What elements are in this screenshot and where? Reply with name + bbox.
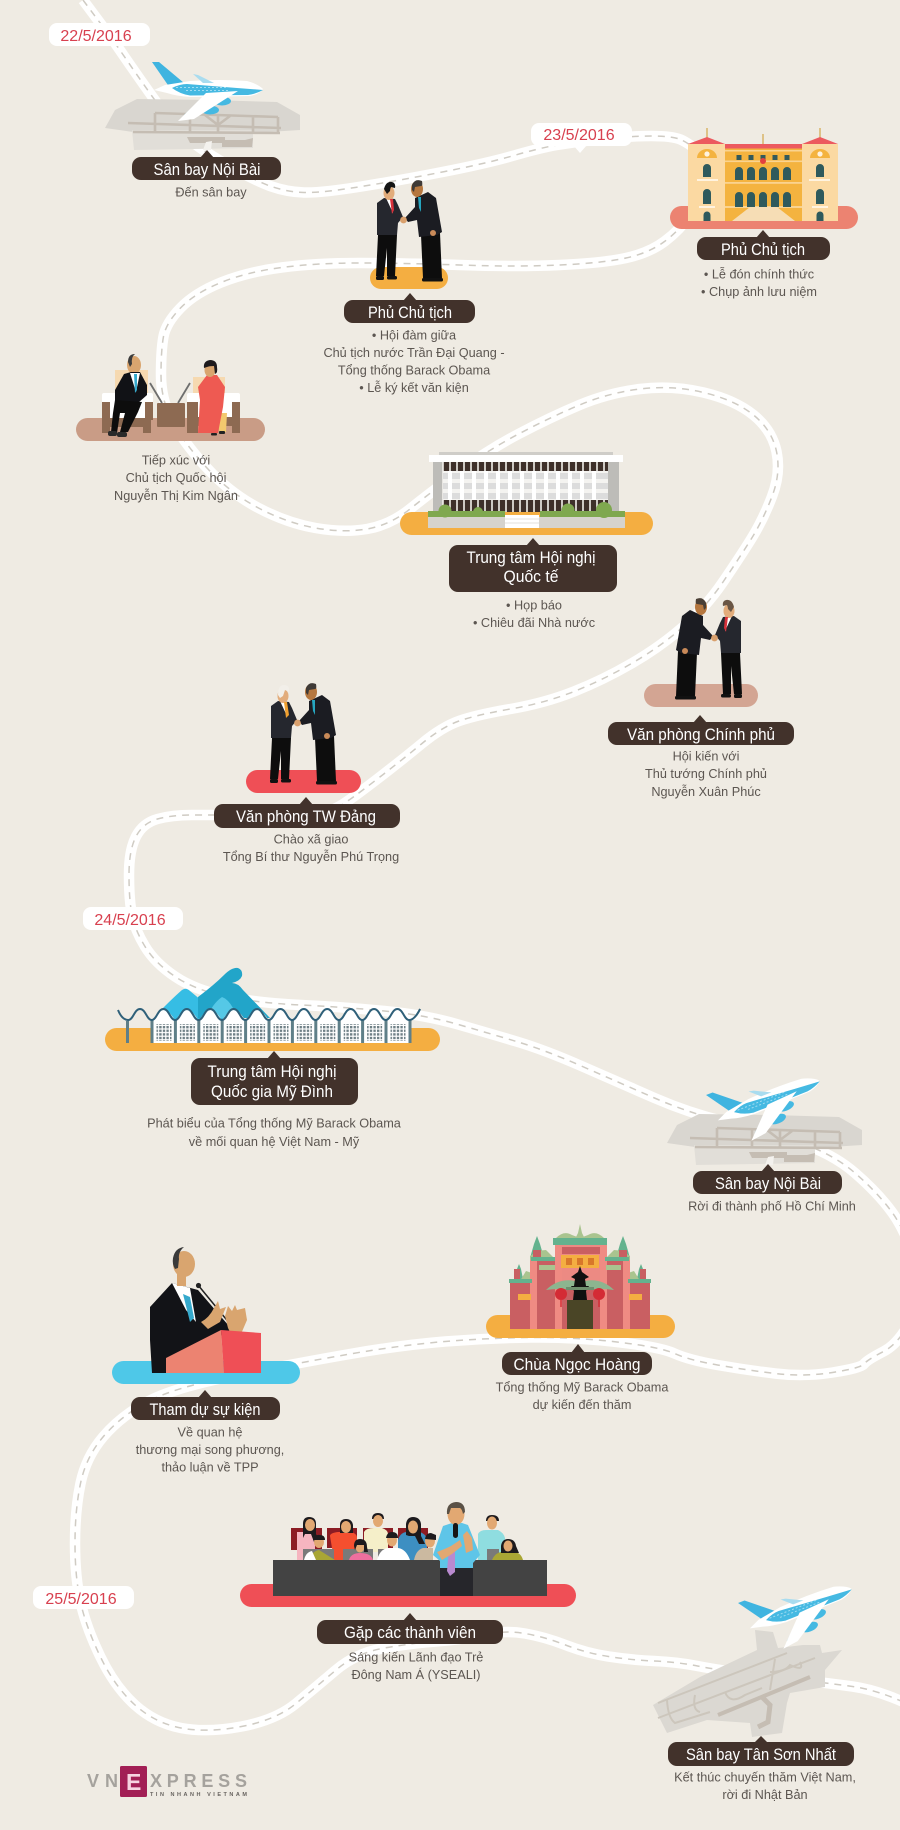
text: notes: Rời đi thành phố Hồ Chí Minh (688, 1200, 856, 1214)
date: 23/5/2016 (531, 123, 632, 153)
text: notes: thương mại song phương, (136, 1443, 284, 1457)
stop: Tan Son Nhat Airport (653, 1563, 863, 1802)
stop: Noi Bai departure (667, 1055, 862, 1214)
label: Tham dự sự kiện (131, 1390, 280, 1420)
stop: YSEALI members (240, 1502, 576, 1682)
label: Chùa Ngọc Hoàng (502, 1344, 652, 1375)
label: Tham dự sự kiện: Tham dự sự kiện (150, 1401, 260, 1419)
text: notes: Kết thúc chuyến thăm Việt Nam, (674, 1770, 856, 1784)
text: talks notes: • Lễ ký kết văn kiện (359, 380, 469, 395)
label: Sân bay Nội Bài: Sân bay Nội Bài (154, 161, 260, 179)
stop: Business event speech (112, 1247, 300, 1474)
text: arrival note: Đến sân bay (175, 186, 247, 200)
date: 24/5/2016 (83, 907, 183, 930)
icon: convention building (428, 452, 625, 528)
pedestal (486, 1315, 675, 1338)
stop: Nội Bài arrival (105, 62, 300, 200)
pedestal (644, 684, 758, 707)
pedestal (240, 1584, 576, 1607)
pedestal (400, 512, 653, 535)
text: notes: Tổng Bí thư Nguyễn Phú Trọng (223, 849, 399, 864)
stop: Presidential Palace welcome (670, 128, 858, 299)
logo: VnExpress (87, 1766, 247, 1798)
label: Trung tâm Hội nghị Quốc tế: Trung tâm Hội nghị (466, 549, 596, 567)
icon: speaker at podium (150, 1247, 261, 1373)
label: Trung tâm Hội nghị Quốc gia Mỹ Đình (191, 1051, 358, 1105)
stop: Ngoc Hoang Pagoda (486, 1224, 675, 1412)
stop: Presidential Palace talks (323, 180, 505, 395)
text: notes: rời đi Nhật Bản (722, 1788, 808, 1802)
text: notes: Sáng kiến Lãnh đạo Trẻ (349, 1650, 483, 1664)
text: welcome notes: • Lễ đón chính thức (704, 266, 815, 282)
text: notes: về mối quan hệ Việt Nam - Mỹ (189, 1135, 360, 1149)
pedestal (370, 267, 448, 289)
label: Trung tâm Hội nghị Quốc gia Mỹ Đình: Trung tâm Hội nghị (208, 1063, 336, 1081)
text: notes: Tổng thống Mỹ Barack Obama (496, 1380, 669, 1394)
label: Sân bay Nội Bài (132, 150, 281, 180)
logo: VnExpress: TIN NHANH VIETNAM (150, 1792, 247, 1798)
label: Gặp các thành viên (317, 1613, 503, 1644)
label: Sân bay Tân Sơn Nhất (668, 1736, 854, 1766)
label: Văn phòng TW Đảng (214, 797, 400, 828)
text: notes: thảo luận về TPP (161, 1460, 259, 1474)
logo: VnExpress: E (126, 1769, 141, 1795)
text: notes: • Họp báo (506, 598, 562, 612)
logo: VnExpress: VN (87, 1771, 118, 1791)
label: Chùa Ngọc Hoàng: Chùa Ngọc Hoàng (514, 1356, 640, 1374)
pedestal (105, 1028, 440, 1051)
icon: airport and plane (105, 62, 300, 150)
icon: palace (688, 128, 838, 221)
label: Gặp các thành viên: Gặp các thành viên (344, 1624, 476, 1642)
icon: convention centre with mountains (118, 968, 420, 1043)
label: Trung tâm Hội nghị Quốc tế (449, 538, 617, 592)
text: notes: dự kiến đến thăm (533, 1398, 631, 1412)
stop: My Dinh National Convention Centre (105, 968, 440, 1149)
text: notes: Đông Nam Á (YSEALI) (351, 1667, 481, 1682)
date: 23/5/2016: 23/5/2016 (543, 127, 615, 144)
label: Trung tâm Hội nghị Quốc gia Mỹ Đình: Quốc gia Mỹ Đình (211, 1083, 333, 1101)
label: Văn phòng Chính phủ (608, 715, 794, 745)
label: Phủ Chủ tịch: Phủ Chủ tịch (368, 304, 452, 322)
label: Phủ Chủ tịch (344, 293, 475, 323)
pedestal (246, 770, 361, 793)
text: welcome notes: • Chụp ảnh lưu niệm (701, 285, 817, 299)
icon: airport and plane (667, 1055, 862, 1165)
label: Trung tâm Hội nghị Quốc tế: Quốc tế (504, 568, 558, 586)
pedestal (76, 418, 265, 441)
icon: handshake (675, 598, 742, 700)
date: 22/5/2016: 22/5/2016 (60, 28, 132, 45)
text: notes: Thủ tướng Chính phủ (645, 767, 767, 781)
label: Phủ Chủ tịch: Phủ Chủ tịch (721, 241, 805, 259)
stop: National Assembly chair meeting (76, 354, 265, 503)
text: notes: Về quan hệ (178, 1426, 242, 1440)
icon: pagoda (509, 1224, 651, 1329)
label: Sân bay Nội Bài (693, 1164, 842, 1194)
stop: Party Central Office (214, 683, 400, 864)
text: talks notes: • Hội đàm giữa (372, 328, 457, 342)
text: notes: Phát biểu của Tổng thống Mỹ Barack Obama (147, 1116, 402, 1130)
text: talks notes: Tổng thống Barack Obama (338, 364, 491, 378)
text: meeting note: Nguyễn Thị Kim Ngân (114, 488, 238, 503)
label: Sân bay Tân Sơn Nhất: Sân bay Tân Sơn Nhất (686, 1746, 836, 1764)
label: Văn phòng TW Đảng: Văn phòng TW Đảng (236, 808, 376, 826)
logo: VnExpress: XPRESS (150, 1771, 247, 1791)
icon: handshake (270, 683, 337, 784)
pedestal (670, 206, 858, 229)
icon: audience with speaker (273, 1502, 547, 1596)
text: notes: Nguyễn Xuân Phúc (651, 784, 761, 799)
icon: handshake (376, 180, 443, 282)
label: Văn phòng Chính phủ: Văn phòng Chính phủ (627, 726, 775, 744)
icon: seated meeting (102, 354, 240, 437)
icon: airport and plane (653, 1563, 863, 1737)
label: Sân bay Nội Bài: Sân bay Nội Bài (715, 1175, 821, 1193)
stop: International Convention Centre (400, 452, 653, 630)
text: notes: Chào xã giao (274, 832, 348, 846)
date: 24/5/2016: 24/5/2016 (94, 912, 166, 929)
text: notes: • Chiêu đãi Nhà nước (473, 616, 596, 630)
text: meeting note: Tiếp xúc với (142, 454, 210, 468)
stop: Government Office (608, 598, 794, 799)
date: 22/5/2016 (49, 23, 150, 46)
pedestal (112, 1361, 300, 1384)
date: 25/5/2016 (33, 1586, 134, 1609)
text: notes: Hội kiến với (673, 750, 739, 764)
text: meeting note: Chủ tịch Quốc hội (126, 471, 226, 485)
label: Phủ Chủ tịch (697, 230, 830, 260)
text: talks notes: Chủ tịch nước Trần Đại Quang - (323, 346, 505, 360)
date: 25/5/2016: 25/5/2016 (45, 1591, 117, 1608)
